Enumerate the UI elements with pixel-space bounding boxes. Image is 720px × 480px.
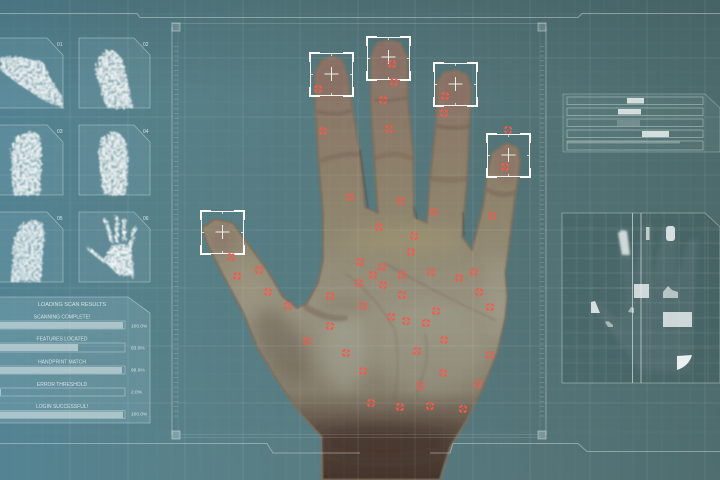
icon: fingerprint 04 — [98, 132, 128, 195]
panel: handprint scan — [562, 213, 720, 383]
hand photo — [202, 40, 520, 480]
result row: handprint match — [0, 360, 145, 374]
panel: top right data rows — [563, 94, 720, 152]
icon: fingerprint 03 — [11, 131, 42, 195]
result row: features located: 83.0% — [131, 346, 145, 352]
panel: fingerprint 05: 05 — [57, 216, 63, 222]
panel: handprint 06 — [79, 212, 150, 282]
icon: fingerprint 05 — [11, 220, 45, 282]
result row: scanning complete — [0, 314, 148, 330]
result row: features located: FEATURES LOCATED — [37, 336, 88, 342]
finger gap shadows — [360, 150, 464, 236]
fingertip tint — [210, 152, 514, 252]
creases — [306, 98, 516, 400]
result row: handprint match: 98.9% — [131, 368, 145, 374]
panel: fingerprint 02 — [79, 38, 150, 108]
result row: error threshold — [0, 382, 143, 396]
bracket: thumb — [201, 211, 244, 254]
central scan frame — [172, 23, 546, 439]
bracket: index finger — [310, 53, 353, 96]
panel: fingerprint 01 — [0, 38, 63, 108]
result row: features located — [0, 336, 145, 352]
result row: scanning complete: SCANNING COMPLETE! — [34, 314, 90, 320]
panel: fingerprint 03: 03 — [57, 129, 63, 135]
panel: fingerprint 04: 04 — [143, 129, 149, 135]
icon: fingerprint 02 — [95, 50, 133, 108]
icon: fingerprint 01 — [0, 57, 63, 108]
palm highlights — [252, 238, 507, 458]
panel: fingerprint 03 — [0, 125, 63, 195]
panel: fingerprint 05 — [0, 212, 63, 282]
red scan markers — [227, 60, 512, 413]
bracket: middle finger — [367, 37, 410, 80]
panel: fingerprint 01: 01 — [57, 42, 63, 48]
heading: loading scan results: LOADING SCAN RESULTS — [38, 302, 106, 308]
bracket: little finger — [487, 134, 530, 177]
scan hand silhouette — [590, 225, 698, 372]
panel: handprint 06: 06 — [143, 216, 149, 222]
panel: fingerprint 02: 02 — [143, 42, 149, 48]
result row: error threshold: ERROR THRESHOLD — [37, 382, 87, 388]
result row: login successful: 100.0% — [131, 412, 148, 418]
icon: handprint — [89, 218, 135, 277]
panel: loading scan results — [0, 297, 150, 423]
scan revealed patches — [591, 226, 692, 370]
bracket: ring finger — [434, 63, 477, 106]
panel: fingerprint 04 — [79, 125, 150, 195]
result row: login successful: LOGIN SUCCESSFUL! — [36, 404, 88, 410]
result row: scanning complete: 100.0% — [131, 324, 148, 330]
result row: error threshold: 2.0% — [131, 390, 143, 396]
target brackets — [201, 37, 530, 254]
result row: login successful — [0, 404, 148, 418]
result row: handprint match: HANDPRINT MATCH — [38, 360, 86, 366]
